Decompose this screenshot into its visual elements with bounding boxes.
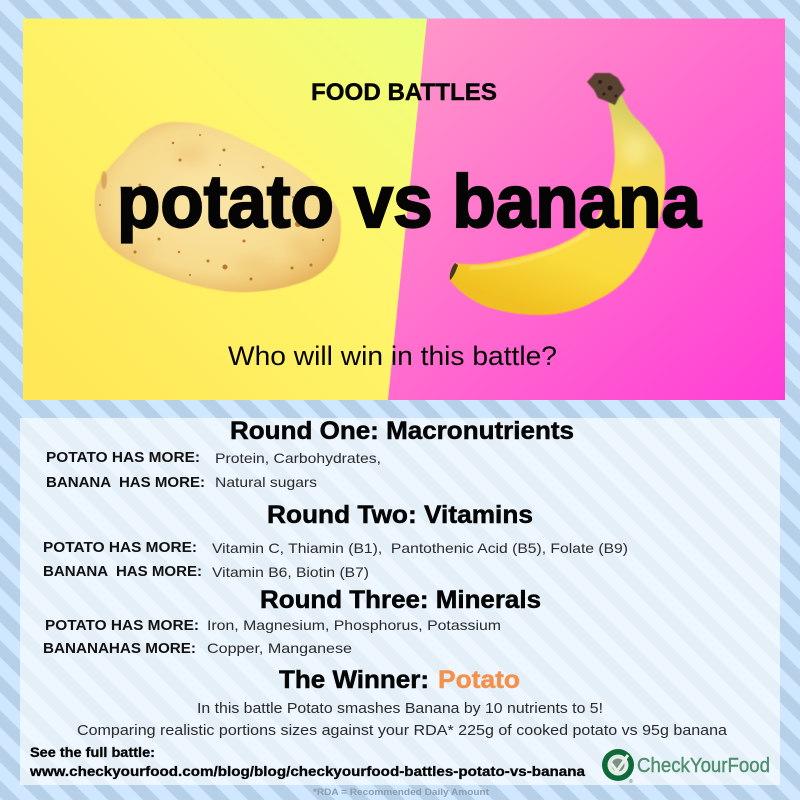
round three potato row: Iron, Magnesium, Phosphorus, Potassium: [207, 617, 501, 633]
round two banana row: Vitamin B6, Biotin (B7): [212, 564, 369, 580]
round two: [43, 501, 628, 580]
winner section: [77, 666, 728, 739]
round one banana row: [46, 474, 317, 491]
round two banana row: [43, 564, 369, 580]
CheckYourFood logo: ®: [629, 778, 633, 785]
round one potato row: Protein, Carbohydrates,: [215, 450, 381, 466]
round two potato row: Vitamin C, Thiamin (B1), Pantothenic Acid (B5), Folate (B9): [212, 540, 628, 556]
eyebrow title: FOOD BATTLES: [311, 79, 497, 106]
potato illustration: [95, 122, 341, 292]
round one potato row: [46, 450, 381, 466]
portions comparison line: Comparing realistic portions sizes against your RDA* 225g of cooked potato vs 95g banana: [77, 723, 728, 739]
round two potato row: [43, 540, 628, 556]
round three banana row: Copper, Manganese: [207, 640, 352, 656]
winner heading: The Winner:: [279, 666, 429, 694]
round two banana row: BANANA HAS MORE:: [43, 564, 202, 580]
winner summary line: In this battle Potato smashes Banana by 10 nutrients to 5!: [197, 701, 603, 717]
round one: [46, 417, 574, 491]
full battle link: www.checkyourfood.com/blog/blog/checkyourfood-battles-potato-vs-banana: [29, 764, 586, 779]
round one banana row: BANANA HAS MORE:: [46, 475, 205, 491]
round one banana row: Natural sugars: [215, 474, 317, 490]
hero panel: [23, 18, 785, 400]
round two heading: Round Two: Vitamins: [267, 501, 533, 529]
round three: [43, 586, 541, 657]
full battle link: [29, 745, 586, 779]
CheckYourFood logo: [602, 749, 770, 785]
round three banana row: [43, 640, 352, 657]
content panel: [20, 417, 780, 785]
round three banana row: BANANAHAS MORE:: [43, 641, 196, 657]
round one potato row: POTATO HAS MORE:: [46, 450, 200, 466]
round two potato row: POTATO HAS MORE:: [43, 540, 197, 556]
RDA footnote: *RDA = Recommended Daily Amount: [313, 787, 490, 798]
panel background: [20, 418, 780, 785]
round three potato row: [45, 617, 501, 634]
banana illustration: [450, 73, 665, 315]
round three heading: Round Three: Minerals: [260, 586, 541, 614]
main title: potato vs banana: [117, 160, 702, 243]
pink half: [388, 18, 785, 400]
winner heading: Potato: [438, 666, 520, 694]
winner heading: [279, 666, 520, 694]
subtitle: Who will win in this battle?: [228, 341, 557, 371]
CheckYourFood logo: CheckYourFood: [637, 755, 770, 777]
yellow half: [23, 18, 427, 400]
round three potato row: POTATO HAS MORE:: [45, 618, 199, 634]
full battle link: See the full battle:: [30, 745, 155, 760]
round one heading: Round One: Macronutrients: [230, 417, 574, 445]
